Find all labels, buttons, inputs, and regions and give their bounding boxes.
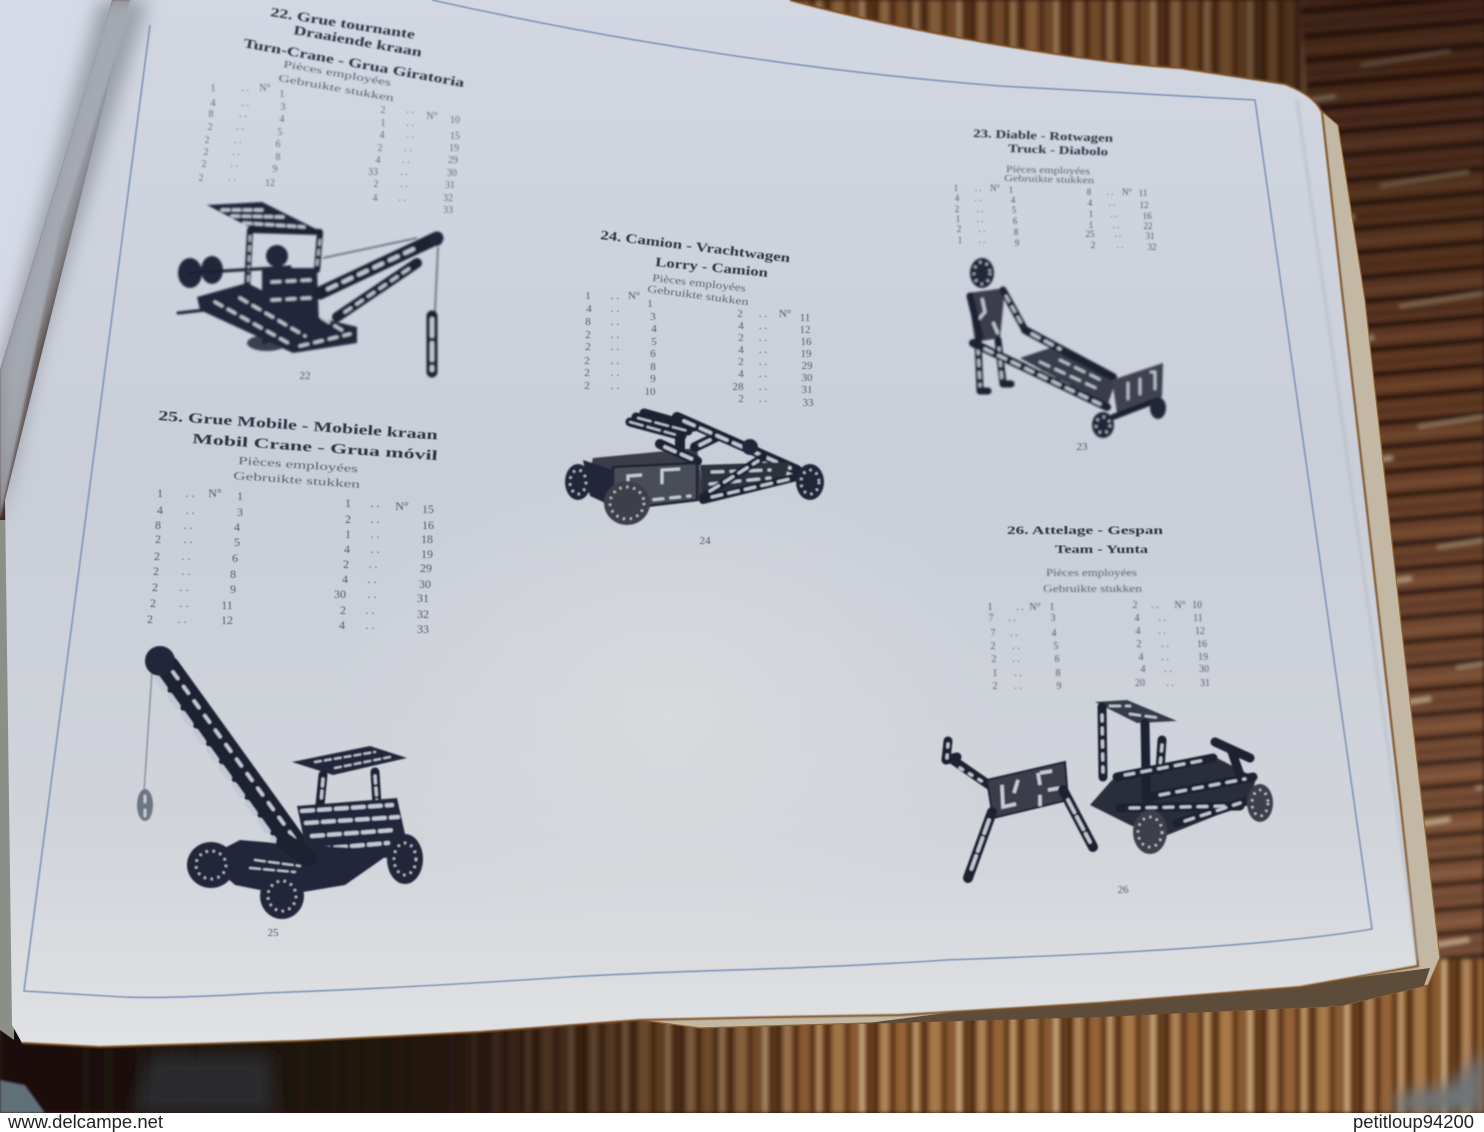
parts table 25: . .	[182, 564, 190, 578]
figure label 24: 24	[700, 535, 711, 547]
parts table 26: 9	[1056, 681, 1062, 692]
title 23: 23. Diable - Rotwagen	[973, 128, 1114, 145]
parts table 26: 12	[1195, 626, 1205, 637]
parts table 24: . .	[611, 316, 619, 328]
parts table 24: 5	[651, 336, 657, 348]
parts table 22: 6	[276, 139, 280, 150]
figure label 26: 26	[1118, 884, 1129, 896]
parts table 25: N°	[395, 499, 409, 513]
parts table 24: 9	[650, 373, 656, 385]
parts table 26: N°	[1174, 600, 1186, 611]
parts table 23: 1	[1089, 209, 1093, 219]
parts table 24: 4	[738, 320, 744, 332]
parts table 26: 16	[1197, 639, 1207, 650]
parts table 22: N°	[259, 83, 271, 94]
parts table 22: 29	[448, 155, 458, 166]
title 26	[1007, 523, 1163, 556]
figure label 25: 25	[268, 927, 279, 939]
parts table 22: 31	[445, 180, 455, 191]
parts table 22: 5	[278, 127, 282, 138]
book page edge thickness	[640, 108, 1440, 1028]
parts table 24: 2	[584, 380, 590, 392]
parts table 26: . .	[1014, 681, 1022, 692]
book bottom page block	[860, 968, 1430, 1024]
parts table 25: . .	[180, 580, 188, 594]
title 24	[600, 227, 792, 280]
parts table 25: . .	[178, 612, 186, 626]
title 25	[158, 409, 438, 464]
parts table 25: . .	[180, 596, 188, 610]
parts table 26: . .	[1012, 654, 1020, 665]
parts table 26: 30	[1199, 664, 1209, 675]
parts table 26: . .	[1151, 600, 1159, 611]
parts table 23: 2	[1091, 240, 1095, 250]
block 23: Diable	[954, 128, 1166, 453]
parts table 22: 15	[450, 131, 460, 142]
parts table 24: N°	[628, 290, 640, 302]
parts table 25: 16	[422, 518, 434, 532]
parts table 25: 4	[339, 618, 345, 632]
block 26: Attelage	[946, 523, 1273, 896]
parts table 25: 8	[230, 567, 236, 581]
parts table 26: . .	[1012, 641, 1020, 652]
parts table 23: 8	[1014, 227, 1019, 237]
parts table 26: . .	[1008, 613, 1016, 624]
parts table 23: 25	[1086, 229, 1095, 239]
parts table 22: . .	[402, 155, 410, 166]
parts table 25: 31	[417, 591, 429, 605]
parts table 23: . .	[975, 193, 981, 203]
parts table 23: N°	[1122, 187, 1132, 197]
parts table 22: 1	[210, 83, 216, 94]
parts table 24: 2	[738, 393, 744, 405]
parts table 25: 30	[419, 577, 431, 591]
parts table 24: 2	[737, 308, 743, 320]
parts table 25: 1	[237, 489, 243, 503]
parts heading 26: Pièces employées	[1046, 568, 1137, 579]
parts table 25: 11	[221, 598, 233, 612]
source site: www.delcampe.net	[7, 1112, 163, 1132]
parts table 25: 6	[232, 551, 238, 565]
parts table 24: 11	[800, 312, 810, 324]
title 22: Turn-Crane - Grua Giratoria	[242, 35, 466, 90]
parts table 26: 4	[1134, 613, 1140, 624]
parts table 26: 5	[1054, 641, 1058, 652]
parts heading 23: Pièces employées	[1006, 165, 1091, 177]
parts table 22: 3	[280, 102, 286, 113]
parts table 26: N°	[1029, 602, 1041, 613]
parts table 24: . .	[759, 381, 767, 393]
parts table 26: 10	[1192, 600, 1202, 611]
left facing page	[0, 0, 112, 370]
parts table 22: . .	[241, 83, 249, 94]
parts table 22: . .	[398, 193, 406, 204]
parts table 23	[954, 183, 1156, 252]
title 26: 26. Attelage - Gespan	[1007, 523, 1163, 537]
parts table 23: . .	[1111, 209, 1117, 219]
parts table 24: 29	[802, 360, 813, 372]
title 22: Draaiende kraan	[292, 22, 424, 60]
title 24: 24. Camion - Vrachtwagen	[600, 227, 792, 265]
parts table 24: . .	[759, 320, 767, 332]
parts table 22: 4	[210, 98, 216, 109]
parts table 25: . .	[366, 603, 374, 617]
parts table 22: 33	[443, 205, 453, 216]
parts table 25: 4	[344, 542, 350, 556]
parts table 24	[584, 290, 814, 409]
title 24: Lorry - Camion	[655, 254, 770, 280]
parts table 23: 2	[955, 204, 959, 214]
parts table 23: 1	[954, 183, 958, 193]
parts table 25: . .	[368, 572, 376, 586]
gutter shadow	[0, 0, 148, 530]
page fold line	[1297, 100, 1418, 960]
title 22: 22. Grue tournante	[270, 4, 416, 42]
parts table 22: 12	[265, 178, 275, 189]
parts table 24: . .	[611, 380, 619, 392]
parts table 22: 10	[450, 115, 460, 126]
parts heading 22: Gebruikte stukken	[277, 73, 395, 104]
parts table 25: 1	[345, 496, 351, 510]
parts table 25: 2	[152, 580, 158, 594]
model 23: truck pushed by figure	[968, 258, 1166, 438]
parts table 24: 19	[800, 348, 812, 360]
parts table 24: . .	[611, 329, 619, 341]
parts heading 25	[233, 455, 361, 491]
parts table 26: 1	[992, 668, 998, 679]
title 23	[973, 128, 1114, 158]
parts table 26: 2	[990, 641, 996, 652]
parts table 22: . .	[406, 130, 414, 141]
parts table 22: 4	[372, 193, 378, 204]
parts table 25: . .	[366, 618, 374, 632]
parts table 22: N°	[426, 111, 438, 122]
block 22: Grue tournante	[178, 4, 466, 382]
model 25: mobile crane	[137, 646, 423, 919]
parts table 24: 3	[650, 311, 656, 323]
parts table 24: 1	[647, 298, 653, 310]
parts table 24: 2	[584, 367, 590, 379]
parts table 24: . .	[759, 368, 767, 380]
parts table 26: . .	[1010, 628, 1018, 639]
parts table 23: 8	[1087, 187, 1092, 197]
parts table 26: 31	[1200, 678, 1210, 689]
parts table 24: . .	[759, 344, 767, 356]
block 25: Grue Mobile	[137, 409, 438, 939]
parts table 26: 1	[1050, 602, 1054, 613]
left page lower sliver	[0, 520, 14, 1040]
parts table 23: . .	[1115, 229, 1121, 239]
parts table 26: 4	[1052, 628, 1056, 639]
parts table 26: 19	[1198, 652, 1208, 663]
parts table 25: 19	[421, 547, 433, 561]
parts table 26: . .	[1161, 652, 1169, 663]
parts table 22: 2	[204, 135, 210, 146]
parts table 23: . .	[979, 235, 985, 245]
parts table 22: 2	[202, 159, 206, 170]
parts table 24: 2	[738, 356, 744, 368]
parts table 24: . .	[759, 393, 767, 405]
parts table 22: . .	[406, 105, 414, 116]
parts table 22: 2	[380, 105, 386, 116]
parts table 25: 5	[234, 535, 240, 549]
parts table 25: 1	[345, 527, 351, 541]
parts table 23: 1	[956, 214, 960, 224]
parts table 25: 15	[422, 502, 434, 516]
parts table 25: . .	[368, 587, 376, 601]
parts heading 26	[1043, 568, 1142, 595]
parts table 26: 4	[1136, 626, 1140, 637]
parts table 23: . .	[1107, 187, 1113, 197]
parts table 22: . .	[404, 143, 412, 154]
parts table 26: 2	[1132, 600, 1138, 611]
parts table 24: . .	[611, 355, 619, 367]
parts table 22: 19	[449, 143, 459, 154]
parts table 22: . .	[239, 109, 247, 120]
figure label 23: 23	[1076, 441, 1088, 453]
parts heading 25: Pièces employées	[238, 455, 358, 475]
parts table 23: 22	[1144, 221, 1152, 231]
parts table 26: 7	[988, 613, 994, 624]
model 24: lorry	[565, 413, 824, 525]
parts table 25: 2	[153, 564, 159, 578]
parts table 23: . .	[977, 214, 983, 224]
parts table 22: . .	[232, 147, 240, 158]
parts table 23: 4	[955, 193, 960, 203]
page highlight	[180, 250, 1220, 1050]
parts table 24: . .	[611, 303, 619, 315]
parts table 26: 2	[992, 681, 998, 692]
parts heading 23	[1004, 165, 1094, 186]
parts table 24: 1	[585, 290, 591, 302]
parts table 25: 2	[155, 532, 161, 546]
parts table 22: 2	[204, 147, 208, 158]
parts table 23: 12	[1140, 200, 1148, 210]
parts table 25: 1	[157, 486, 163, 500]
parts table 23: . .	[1109, 198, 1115, 208]
parts heading 24	[647, 273, 750, 308]
parts table 24: . .	[759, 332, 767, 344]
parts table 24: 2	[585, 329, 591, 341]
parts table 24: . .	[611, 367, 619, 379]
title 26: Team - Yunta	[1055, 542, 1148, 556]
parts table 24: 33	[802, 397, 814, 409]
parts table 23: 31	[1146, 231, 1154, 241]
parts table 25: 33	[417, 622, 429, 636]
parts table 23: 6	[1013, 216, 1018, 226]
parts table 24: 2	[738, 332, 744, 344]
parts table 24: . .	[759, 356, 767, 368]
parts table 23: . .	[977, 204, 983, 214]
parts table 23: 32	[1148, 242, 1156, 252]
parts table 23: 1	[958, 235, 962, 245]
watermark bar	[0, 1112, 1484, 1132]
parts table 24: N°	[779, 308, 791, 320]
parts table 22: 8	[276, 152, 280, 163]
parts table 23: 2	[957, 224, 961, 234]
parts table 25: 4	[157, 503, 163, 517]
parts table 22: . .	[241, 98, 249, 109]
parts table 22: . .	[230, 159, 238, 170]
parts heading 24: Gebruikte stukken	[647, 284, 750, 308]
parts table 26: 4	[1140, 664, 1146, 675]
parts table 22: 8	[208, 109, 214, 120]
parts table 26: 6	[1054, 654, 1060, 665]
parts table 25: . .	[370, 512, 380, 526]
parts table 23: 1	[1009, 185, 1013, 195]
parts table 25: 2	[147, 612, 153, 626]
parts table 22: 4	[376, 155, 380, 166]
parts table 24: 10	[644, 386, 656, 398]
model 22: turning crane	[178, 202, 443, 372]
parts table 24: . .	[611, 341, 619, 353]
parts table 26: 2	[992, 654, 996, 665]
parts table 22: 30	[447, 168, 457, 179]
parts heading 24: Pièces employées	[652, 273, 746, 295]
parts table 23: . .	[1117, 240, 1123, 250]
parts table 22: 33	[368, 167, 378, 178]
parts table 22: 2	[208, 122, 212, 133]
parts heading 23: Gebruikte stukken	[1004, 174, 1094, 186]
parts table 22: . .	[400, 167, 408, 178]
parts table 23: . .	[975, 183, 981, 193]
parts table 26: . .	[1158, 613, 1166, 624]
parts table 25: . .	[186, 503, 194, 517]
parts table 26	[988, 600, 1210, 692]
parts table 22: . .	[228, 173, 236, 184]
parts table 25: 3	[237, 505, 243, 519]
parts table 24: 4	[586, 303, 592, 315]
parts table 24: 31	[802, 384, 812, 396]
parts table 24: 4	[738, 368, 744, 380]
figure label 22: 22	[300, 370, 310, 382]
parts table 23: 11	[1139, 188, 1147, 198]
parts table 26: 7	[990, 628, 996, 639]
parts table 23: . .	[979, 224, 985, 234]
parts table 24: 2	[585, 341, 591, 353]
parts table 24: 2	[584, 355, 590, 367]
parts table 22: 9	[272, 164, 278, 175]
parts table 22: 2	[378, 143, 382, 154]
parts table 25: 2	[340, 603, 346, 617]
parts table 22: 1	[280, 89, 284, 100]
parts table 23: 4	[1088, 198, 1093, 208]
parts table 23: N°	[990, 183, 1000, 193]
parts table 25: 2	[343, 557, 349, 571]
parts table 25: 4	[234, 520, 240, 534]
parts table 26: 20	[1135, 678, 1145, 689]
parts table 23: 5	[1012, 205, 1017, 215]
title 22	[242, 4, 466, 90]
parts table 26: 4	[1138, 652, 1144, 663]
parts table 24: 30	[802, 372, 813, 384]
parts table 25: 2	[150, 596, 156, 610]
parts heading 25: Gebruikte stukken	[233, 470, 361, 491]
title 25: Mobil Crane - Grua móvil	[192, 432, 438, 464]
parts table 22: . .	[400, 179, 408, 190]
parts table 22: . .	[234, 135, 242, 146]
model 26: team and cart	[946, 700, 1273, 878]
parts table 22: 4	[280, 114, 284, 125]
parts table 25: 2	[345, 512, 351, 526]
parts table 25: 32	[417, 607, 429, 621]
parts table 24: 8	[650, 361, 656, 373]
parts table 23: 4	[1011, 195, 1016, 205]
seller name: petitloup94200	[1353, 1112, 1474, 1132]
parts table 22: 2	[374, 179, 378, 190]
parts table 25: N°	[208, 486, 222, 500]
parts table 24: 28	[732, 381, 744, 393]
parts table 22: 1	[380, 118, 386, 129]
parts table 25: 2	[154, 549, 160, 563]
parts table 26: . .	[1014, 668, 1022, 679]
parts table 22: 2	[198, 173, 204, 184]
parts table 26: 2	[1136, 639, 1142, 650]
parts table 24: 4	[738, 344, 744, 356]
parts table 22: . .	[236, 122, 244, 133]
parts table 24: . .	[611, 290, 619, 302]
parts table 25: . .	[370, 542, 380, 556]
parts table 23: 1	[1089, 220, 1093, 230]
parts table 26: 8	[1056, 668, 1060, 679]
parts table 24: . .	[759, 308, 767, 320]
parts table 24: 8	[585, 316, 591, 328]
parts table 25: 8	[155, 518, 161, 532]
parts table 22	[198, 83, 460, 216]
parts table 26: . .	[1161, 639, 1169, 650]
parts table 24: 16	[800, 336, 812, 348]
parts table 25: 4	[342, 572, 348, 586]
parts table 25: 30	[334, 587, 346, 601]
parts table 26: 3	[1050, 613, 1056, 624]
parts table 23: 9	[1015, 238, 1020, 248]
parts table 25	[147, 486, 434, 636]
parts table 22: . .	[406, 118, 414, 129]
title 23: Truck - Diabolo	[1008, 143, 1109, 158]
parts table 24: 12	[800, 324, 810, 336]
parts table 22: 32	[443, 193, 453, 204]
parts table 25: 18	[421, 532, 433, 546]
parts table 24: 4	[651, 323, 657, 335]
parts table 25: . .	[184, 518, 192, 532]
parts table 25: 29	[420, 561, 432, 575]
parts table 25: . .	[184, 532, 192, 546]
parts table 22: 4	[380, 130, 384, 141]
parts table 26: 11	[1193, 613, 1203, 624]
parts table 25: . .	[370, 496, 380, 510]
parts table 23: . .	[1113, 220, 1119, 230]
parts table 26: . .	[1016, 602, 1024, 613]
block 24: Camion	[565, 227, 824, 547]
parts heading 26: Gebruikte stukken	[1043, 584, 1142, 595]
title 25: 25. Grue Mobile - Mobiele kraan	[158, 409, 438, 444]
parts table 26: . .	[1158, 626, 1166, 637]
parts heading 22: Pièces employées	[282, 59, 392, 89]
parts table 26: . .	[1164, 664, 1172, 675]
parts table 25: . .	[370, 527, 380, 541]
parts table 23: 16	[1142, 211, 1152, 221]
parts table 25: . .	[182, 549, 190, 563]
parts table 26: . .	[1166, 678, 1174, 689]
parts table 24: 6	[650, 348, 656, 360]
parts heading 22	[277, 59, 395, 104]
parts table 26: 1	[988, 602, 992, 613]
parts table 25: . .	[186, 486, 194, 500]
parts table 25: . .	[368, 557, 378, 571]
parts table 25: 9	[230, 582, 236, 596]
parts table 25: 12	[221, 613, 233, 627]
